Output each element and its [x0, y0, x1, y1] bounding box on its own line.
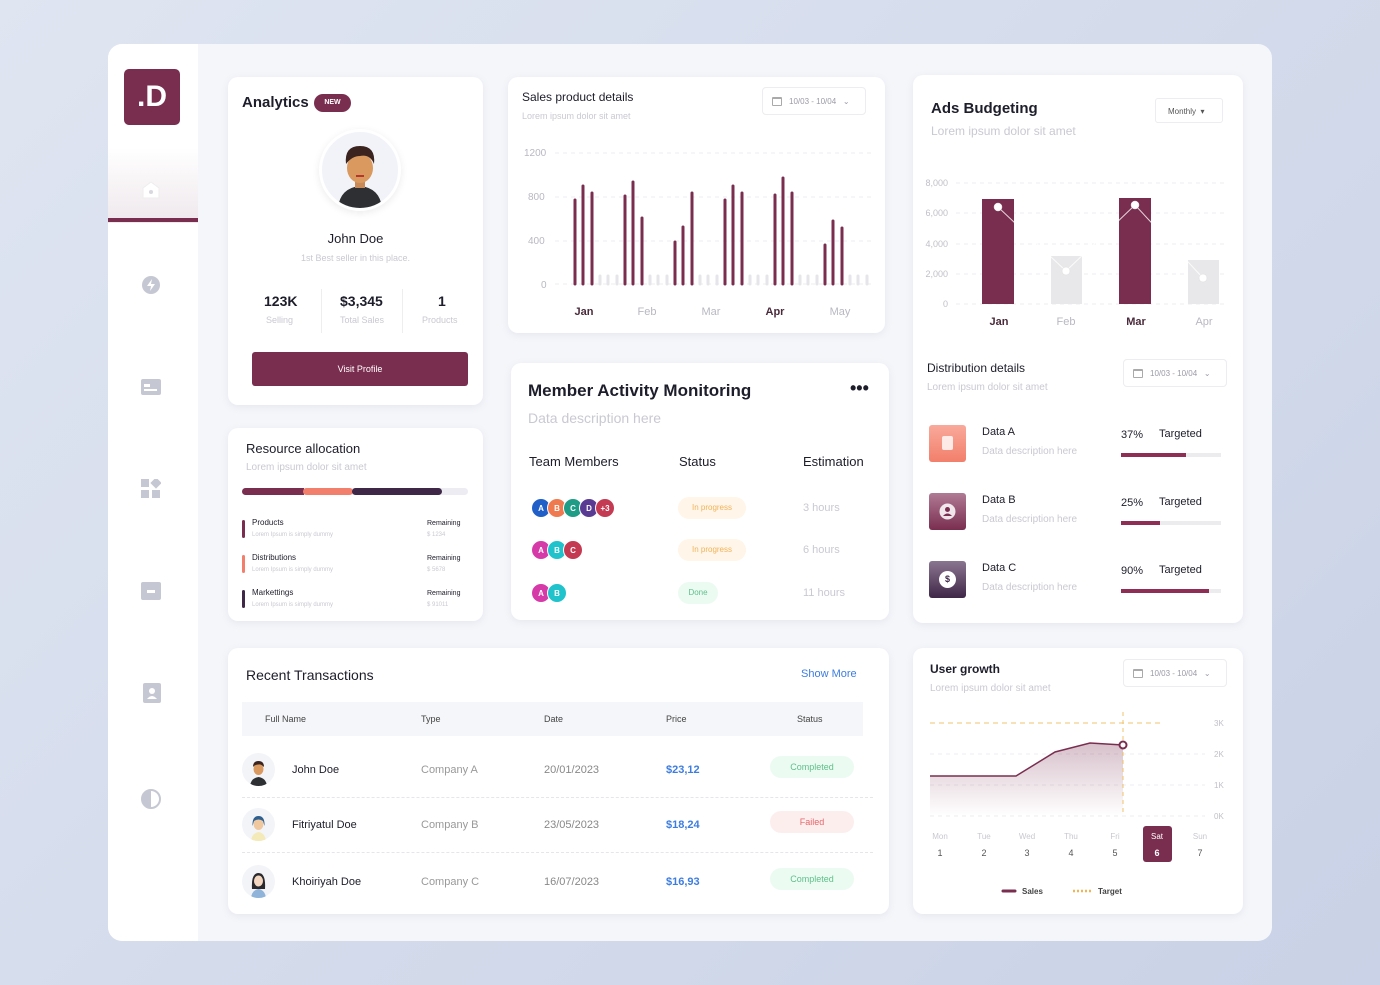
stats: Total Sales — [340, 315, 384, 325]
badge: new: NEW — [324, 99, 341, 106]
bar chart: Jan — [575, 306, 594, 318]
row 2: A — [538, 546, 544, 555]
row: Fitriyatul Doe: Company B — [421, 819, 478, 831]
icon: home — [142, 182, 159, 198]
row: Khoiriyah Doe: 16/07/2023 — [544, 876, 599, 888]
icon: contrast — [141, 789, 161, 809]
badge: new — [314, 94, 351, 112]
bar chart: Apr — [766, 306, 785, 318]
more menu: ••• — [850, 378, 869, 398]
row: Fitriyatul Doe: 23/05/2023 — [544, 819, 599, 831]
line chart: 5 — [1112, 848, 1118, 858]
data B: Data description here — [982, 514, 1077, 525]
icon: bolt — [142, 276, 160, 294]
panel: recent transactions — [228, 648, 889, 914]
stats: Products — [422, 315, 458, 325]
bar chart: 1200 — [524, 148, 547, 159]
heading: Analytics — [242, 94, 309, 111]
date dropdown: 10/03 - 10/04 ⌄ — [789, 97, 850, 106]
stats: $3,345 — [340, 293, 383, 309]
name: John Doe — [328, 231, 383, 246]
row: John Doe: Company A — [421, 764, 478, 776]
row 1: B — [554, 504, 560, 513]
line chart: Sun — [1193, 832, 1207, 841]
row 1: A — [538, 504, 544, 513]
panel: resource allocation: Lorem ipsum dolor sit amet — [246, 462, 367, 473]
panel: ads budgeting & distribution: 10/03 - 10/04 ⌄ — [1150, 369, 1211, 378]
panel: resource allocation — [228, 428, 483, 621]
list items: $ 91011 — [427, 602, 448, 608]
line chart: 6 — [1154, 848, 1160, 858]
list items: Remaining — [427, 520, 460, 527]
row 1: +3 — [600, 504, 610, 513]
sidebar active item — [108, 148, 198, 223]
stats: 1 — [438, 293, 446, 309]
row 2: B — [554, 546, 560, 555]
line chart: 2 — [981, 848, 987, 858]
line chart: 1 — [937, 848, 943, 858]
row: Fitriyatul Doe: Failed — [800, 817, 824, 827]
stats — [264, 289, 458, 333]
panel: ads budgeting & distribution — [913, 75, 1243, 623]
data B: Data B — [982, 494, 1016, 506]
data A: Targeted — [1159, 428, 1202, 440]
button: visit profile: Visit Profile — [338, 364, 382, 374]
ads bar chart: Mar — [1126, 316, 1146, 328]
list items: Remaining — [427, 590, 460, 597]
row: Khoiriyah Doe — [242, 865, 854, 898]
data A: 37% — [1121, 429, 1143, 441]
row: Khoiriyah Doe: $16,93 — [666, 876, 700, 888]
ads bar chart: 0 — [943, 299, 948, 309]
line chart: 1K — [1214, 781, 1224, 790]
logo — [124, 69, 180, 125]
row: John Doe: Completed — [790, 762, 834, 772]
bar chart: 0 — [541, 280, 547, 291]
line chart: 7 — [1197, 848, 1203, 858]
data A: Data A — [982, 426, 1015, 438]
row 2: In progress — [692, 545, 732, 554]
ads bar chart: Jan — [990, 316, 1009, 328]
data C: Targeted — [1159, 564, 1202, 576]
list items: Products — [252, 518, 284, 527]
main dashboard panel — [108, 44, 1272, 941]
row 1: 3 hours — [803, 502, 840, 514]
panel: user growth: Lorem ipsum dolor sit amet — [930, 683, 1051, 694]
data A: Data description here — [982, 446, 1077, 457]
panel: sales product details: Lorem ipsum dolor sit amet — [522, 111, 631, 121]
list items: Remaining — [427, 555, 460, 562]
row: Khoiriyah Doe: Company C — [421, 876, 479, 888]
line chart: Target — [1098, 887, 1122, 896]
ads bar chart: 8,000 — [925, 178, 948, 188]
row: John Doe — [242, 753, 854, 786]
row: John Doe: 20/01/2023 — [544, 764, 599, 776]
line chart: Sales — [1022, 887, 1043, 896]
line chart: 0K — [1214, 812, 1224, 821]
data C: 90% — [1121, 565, 1143, 577]
icon: card — [141, 379, 161, 395]
panel: sales product details: Sales product details — [522, 90, 633, 104]
panel: ads budgeting & distribution: Ads Budgeting — [931, 100, 1038, 117]
row 3: 11 hours — [803, 587, 845, 599]
row: Khoiriyah Doe: Khoiriyah Doe — [292, 876, 361, 888]
ads bar chart: 2,000 — [925, 269, 948, 279]
ads bar chart: Feb — [1057, 316, 1075, 328]
button: visit profile — [252, 352, 468, 386]
bar chart: Feb — [638, 306, 656, 318]
line chart: 2K — [1214, 750, 1224, 759]
list items: $ 1234 — [427, 532, 445, 538]
sidebar — [108, 44, 198, 941]
table header: Status — [797, 714, 823, 724]
line chart: Mon — [932, 832, 948, 841]
row 2: C — [570, 546, 576, 555]
list items — [242, 518, 460, 608]
monthly dropdown: Monthly ▾ — [1168, 107, 1204, 116]
avatar — [319, 129, 401, 211]
ads bar chart: Apr — [1195, 316, 1213, 328]
row 3: A — [538, 589, 544, 598]
icon: contact — [143, 683, 161, 703]
row: John Doe: $23,12 — [666, 764, 700, 776]
data A — [929, 425, 1221, 462]
data C: $ — [945, 574, 950, 584]
list items: Lorem Ipsum is simply dummy — [252, 532, 333, 538]
table headers: Team Members — [529, 454, 619, 469]
stacked progress bar — [242, 488, 468, 495]
line chart: 3K — [1214, 719, 1224, 728]
row: Fitriyatul Doe — [242, 808, 854, 841]
panel: analytics — [228, 77, 483, 405]
date dropdown — [762, 87, 866, 115]
panel: user growth: 10/03 - 10/04 ⌄ — [1150, 669, 1211, 678]
table header: Full Name — [265, 714, 306, 724]
bar chart: 400 — [528, 236, 545, 247]
stats: 123K — [264, 293, 297, 309]
row 1: D — [586, 504, 592, 513]
data B: Targeted — [1159, 496, 1202, 508]
sidebar icons — [141, 182, 161, 809]
table header: Price — [666, 714, 687, 724]
row: Fitriyatul Doe: $18,24 — [666, 819, 700, 831]
row: Khoiriyah Doe: Completed — [790, 874, 834, 884]
distribution heading: Distribution details — [927, 361, 1025, 375]
line chart: 4 — [1068, 848, 1074, 858]
data B: 25% — [1121, 497, 1143, 509]
row 3: Done — [688, 588, 708, 597]
bar chart — [524, 148, 871, 318]
panel: member activity monitoring: Data description here — [528, 410, 661, 426]
row 1 — [532, 497, 840, 519]
line chart: Fri — [1110, 832, 1120, 841]
panel: member activity monitoring — [511, 363, 889, 620]
ads bar chart: 6,000 — [925, 208, 948, 218]
panel: member activity monitoring: Member Activity Monitoring — [528, 381, 751, 400]
data B — [929, 493, 1221, 530]
panel: analytics: 1st Best seller in this place. — [301, 253, 410, 263]
row 3 — [532, 582, 845, 604]
row 1: In progress — [692, 503, 732, 512]
data C: Data C — [982, 562, 1016, 574]
icon: archive — [141, 582, 161, 600]
panel: user growth: User growth — [930, 662, 1000, 676]
table header: Type — [421, 714, 441, 724]
monthly dropdown — [1155, 98, 1223, 123]
row: Fitriyatul Doe: Fitriyatul Doe — [292, 819, 357, 831]
stats: Selling — [266, 315, 293, 325]
data C: Data description here — [982, 582, 1077, 593]
row 3: B — [554, 589, 560, 598]
bar chart: Mar — [702, 306, 721, 318]
row: John Doe: John Doe — [292, 764, 339, 776]
line chart: Wed — [1019, 832, 1035, 841]
ads bar chart — [925, 178, 1224, 328]
panel: recent transactions: Recent Transactions — [246, 667, 374, 683]
link: show more: Show More — [801, 668, 857, 680]
ads bar chart: 4,000 — [925, 239, 948, 249]
list items: Lorem Ipsum is simply dummy — [252, 567, 333, 573]
list items: Distributions — [252, 553, 296, 562]
panel: member activity monitoring: Status — [679, 454, 716, 469]
panel: member activity monitoring: Estimation — [803, 454, 864, 469]
data C — [929, 561, 1221, 598]
panel: resource allocation: Resource allocation — [246, 441, 360, 456]
line chart: Tue — [977, 832, 991, 841]
panel: ads budgeting & distribution: Lorem ipsum dolor sit amet — [931, 124, 1076, 138]
line chart: Sat — [1151, 832, 1164, 841]
logo: .D — [137, 80, 167, 113]
line chart: 3 — [1024, 848, 1030, 858]
bar chart: 800 — [528, 192, 545, 203]
row 1: C — [570, 504, 576, 513]
line chart: Thu — [1064, 832, 1078, 841]
line chart — [930, 712, 1224, 896]
row 2: 6 hours — [803, 544, 840, 556]
table header: Date — [544, 714, 563, 724]
icon: widgets — [141, 479, 161, 498]
list items: $ 5678 — [427, 567, 445, 573]
panel: ads budgeting & distribution: Lorem ipsum dolor sit amet — [927, 382, 1048, 393]
list items: Markettings — [252, 588, 293, 597]
bar chart: May — [830, 306, 851, 318]
list items: Lorem Ipsum is simply dummy — [252, 602, 333, 608]
table header — [242, 702, 863, 736]
row 2 — [532, 539, 840, 561]
panel: user growth — [913, 648, 1243, 914]
panel: sales product details — [508, 77, 885, 333]
